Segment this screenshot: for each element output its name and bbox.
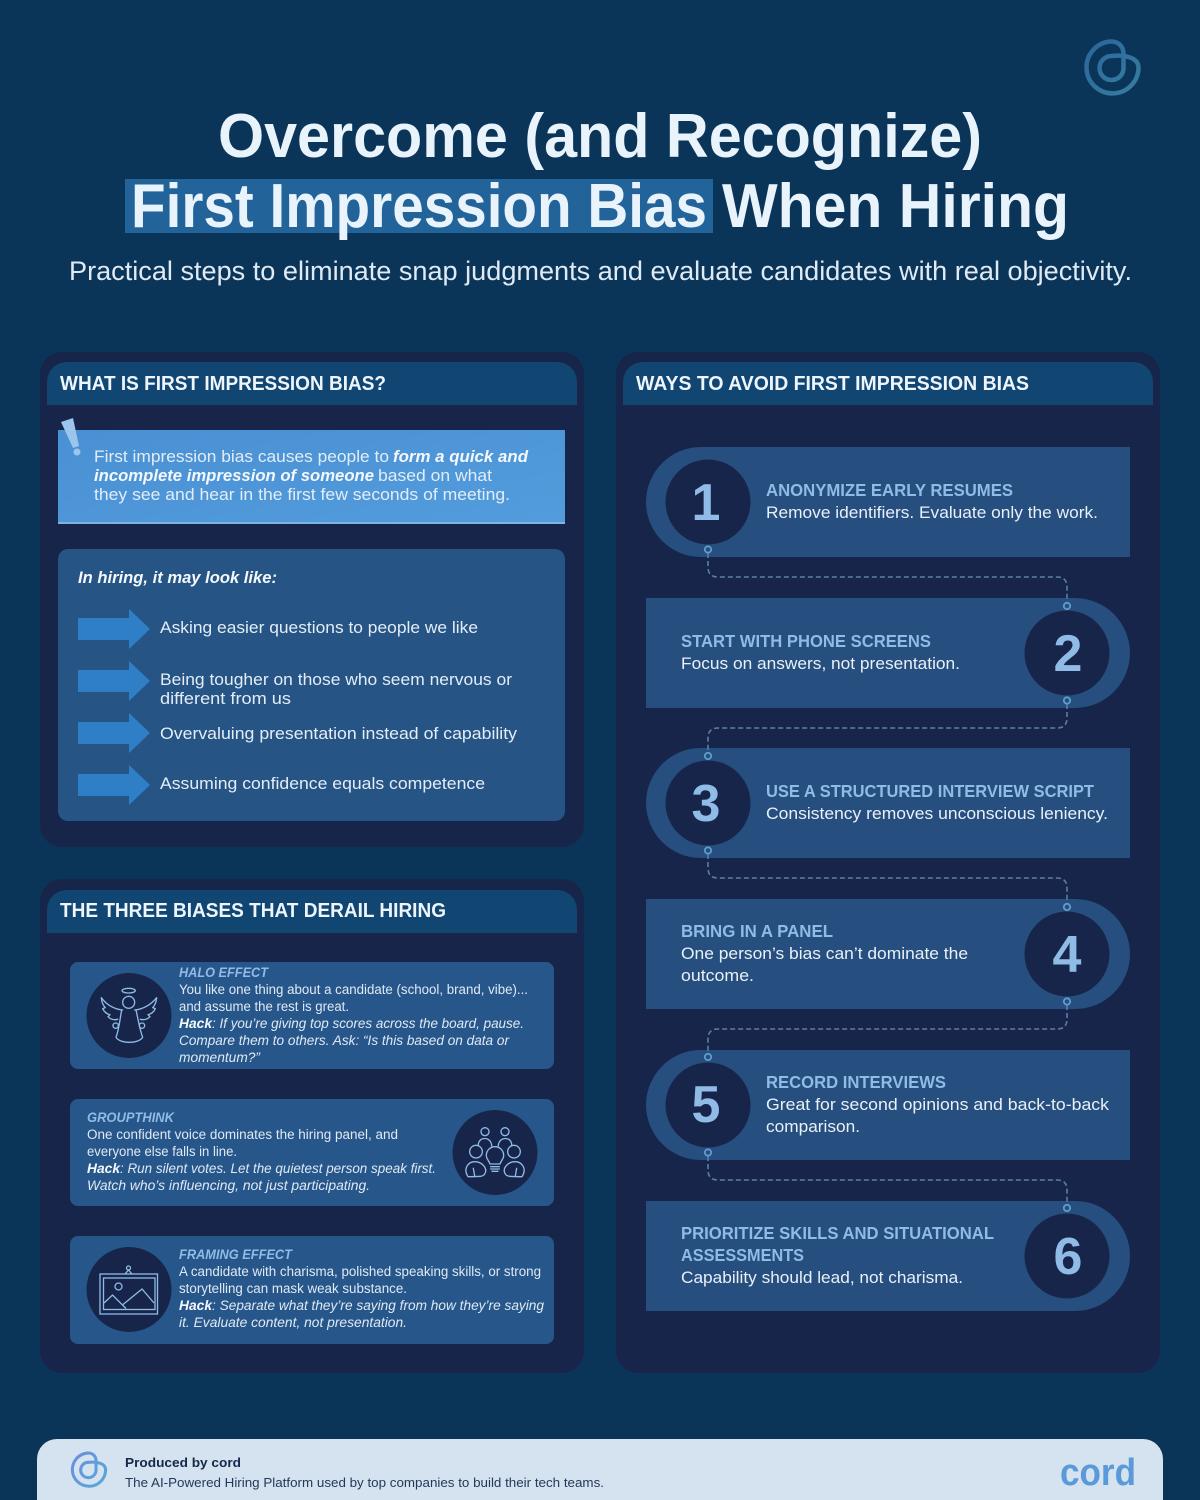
connector 4 to 5 [705, 998, 1070, 1060]
arrow 2 [78, 661, 150, 701]
step 5 [646, 1050, 1130, 1160]
panel header [47, 362, 577, 405]
example 3: Overvaluing presentation instead of capability [160, 724, 518, 743]
footer heading: Produced by cord [125, 1455, 241, 1470]
halo effect text: and assume the rest is great. [179, 999, 349, 1014]
icon: angel [86, 973, 172, 1058]
step 6: PRIORITIZE SKILLS AND SITUATIONAL [681, 1223, 994, 1243]
icon: exclamation mark [61, 418, 80, 456]
hiring examples box [58, 549, 565, 821]
panel header [623, 362, 1153, 405]
icon: group with lightbulb [452, 1110, 538, 1195]
groupthink text: One confident voice dominates the hiring panel, and [87, 1127, 398, 1142]
panel header: WAYS TO AVOID FIRST IMPRESSION BIAS [636, 373, 1029, 395]
step 3: Consistency removes unconscious leniency. [766, 804, 1108, 823]
title [125, 102, 1069, 241]
step 2: START WITH PHONE SCREENS [681, 631, 931, 651]
connector 1 to 2 [705, 546, 1070, 609]
definition callout: form a quick and [393, 447, 529, 466]
step 2 [646, 598, 1130, 708]
footer wordmark: cord [1060, 1452, 1136, 1494]
step 6: ASSESSMENTS [681, 1245, 804, 1265]
halo effect text: : If you’re giving top scores across the board, pause. [212, 1016, 524, 1031]
step 2: 2 [1054, 625, 1082, 683]
framing effect text: Hack [179, 1298, 214, 1313]
definition callout: they see and hear in the first few seconds of meeting. [94, 485, 510, 504]
step 4: outcome. [681, 966, 754, 985]
step 3: 3 [692, 775, 720, 833]
example 4: Assuming confidence equals competence [160, 774, 485, 793]
groupthink text: : Run silent votes. Let the quietest person speak first. [120, 1161, 436, 1176]
arrow 3 [78, 713, 150, 753]
example 2: different from us [160, 689, 291, 708]
title line 2 rest: When Hiring [722, 172, 1069, 241]
groupthink text [87, 1110, 436, 1193]
example 2 [160, 670, 512, 708]
panel header: WHAT IS FIRST IMPRESSION BIAS? [60, 373, 386, 395]
footer description: The AI-Powered Hiring Platform used by top companies to build their tech teams. [125, 1476, 604, 1490]
halo effect text: Compare them to others. Ask: “Is this based on data or [179, 1033, 509, 1048]
step 5: 5 [692, 1076, 720, 1134]
step 3 [646, 748, 1130, 858]
framing effect text: FRAMING EFFECT [179, 1247, 294, 1262]
step 5: RECORD INTERVIEWS [766, 1072, 946, 1092]
panel header [47, 890, 577, 933]
framing effect text: it. Evaluate content, not presentation. [179, 1315, 407, 1330]
halo effect text: Hack [179, 1016, 214, 1031]
groupthink text: everyone else falls in line. [87, 1144, 237, 1159]
definition callout [58, 430, 565, 524]
halo effect text: momentum?” [179, 1050, 261, 1065]
title line 2 highlighted: First Impression Bias [131, 172, 707, 241]
arrow 4 [78, 765, 150, 805]
connector 3 to 4 [705, 847, 1070, 910]
framing effect text: A candidate with charisma, polished speaking skills, or strong [179, 1264, 541, 1279]
groupthink text: GROUPTHINK [87, 1110, 175, 1125]
halo effect text [179, 965, 528, 1065]
step 1: 1 [692, 474, 720, 532]
icon: framed picture [86, 1247, 172, 1332]
step 1 [646, 447, 1130, 557]
panel header: THE THREE BIASES THAT DERAIL HIRING [60, 900, 446, 922]
framing effect text [179, 1247, 544, 1330]
step 3: USE A STRUCTURED INTERVIEW SCRIPT [766, 781, 1094, 801]
icon: cord logo top right [1087, 41, 1138, 93]
definition callout: incomplete impression of someone [94, 466, 374, 485]
step 1: ANONYMIZE EARLY RESUMES [766, 480, 1013, 500]
example 2: Being tougher on those who seem nervous or [160, 670, 512, 689]
example 1: Asking easier questions to people we like [160, 618, 478, 637]
groupthink text: Watch who’s influencing, not just participating. [87, 1178, 370, 1193]
step 5: Great for second opinions and back-to-back [766, 1095, 1110, 1114]
panel: ways to avoid [616, 352, 1160, 1373]
examples heading: In hiring, it may look like: [78, 568, 277, 587]
step 4: One person’s bias can’t dominate the [681, 944, 968, 963]
arrow 1 [78, 609, 150, 649]
subtitle: Practical steps to eliminate snap judgments and evaluate candidates with real objectivity. [69, 256, 1132, 286]
connector 5 to 6 [705, 1149, 1070, 1211]
definition callout: based on what [378, 466, 492, 485]
step 6 [646, 1201, 1130, 1311]
step 1: Remove identifiers. Evaluate only the work. [766, 503, 1098, 522]
step 4: BRING IN A PANEL [681, 921, 833, 941]
connector 2 to 3 [705, 697, 1070, 759]
groupthink text: Hack [87, 1161, 122, 1176]
card: framing effect [70, 1236, 554, 1344]
step 6: Capability should lead, not charisma. [681, 1268, 963, 1287]
footer [37, 1439, 1163, 1500]
title line 1: Overcome (and Recognize) [218, 102, 982, 171]
panel: what is first impression bias [40, 352, 584, 847]
icon: cord logo footer [72, 1453, 106, 1486]
step 2: Focus on answers, not presentation. [681, 654, 960, 673]
step 6: 6 [1054, 1228, 1082, 1286]
step 4 [646, 899, 1130, 1009]
framing effect text: storytelling can mask weak substance. [179, 1281, 407, 1296]
step 5: comparison. [766, 1117, 860, 1136]
halo effect text: HALO EFFECT [179, 965, 270, 980]
step 4: 4 [1053, 926, 1082, 984]
card: groupthink [70, 1099, 554, 1206]
card: halo effect [70, 962, 554, 1069]
definition callout: First impression bias causes people to [94, 447, 389, 466]
halo effect text: You like one thing about a candidate (school, brand, vibe)... [179, 982, 528, 997]
title highlight [125, 179, 713, 233]
panel: three biases [40, 879, 584, 1373]
framing effect text: : Separate what they’re saying from how they’re saying [212, 1298, 544, 1313]
